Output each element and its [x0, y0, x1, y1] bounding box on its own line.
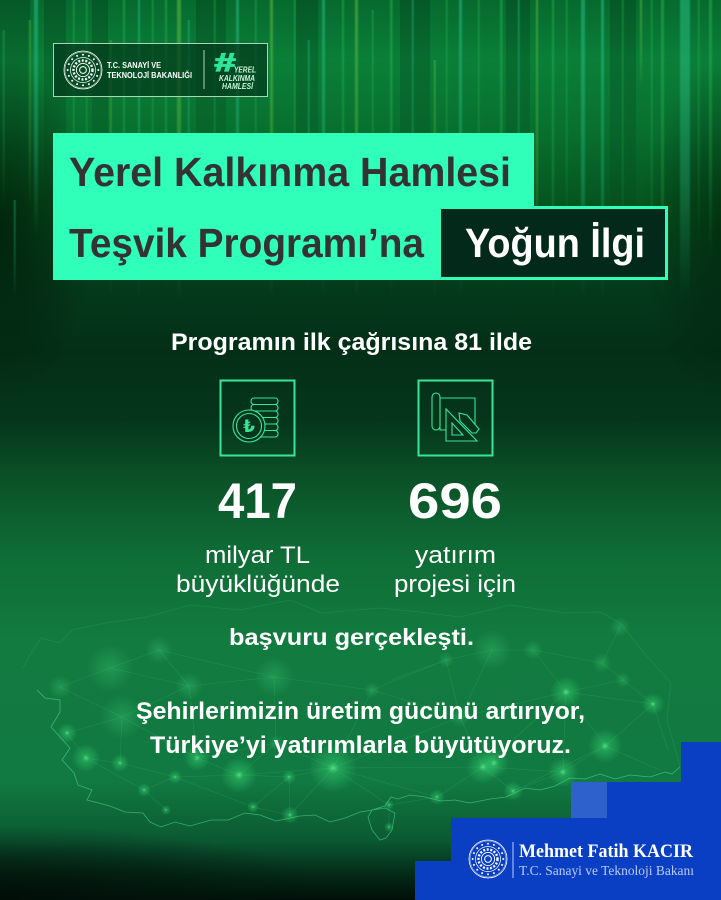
value 696: 696 [408, 473, 502, 529]
map of Türkiye network [23, 600, 680, 840]
icon: plan and set square [418, 380, 492, 456]
caption: büyüklüğünde [176, 571, 340, 598]
network lines [60, 627, 668, 827]
result statement: başvuru gerçekleşti. [229, 624, 474, 650]
ministry name: T.C. SANAYİ VE [107, 61, 162, 70]
header logo box [54, 44, 268, 96]
icon: ministry emblem [64, 51, 102, 89]
minister title: T.C. Sanayi ve Teknoloji Bakanı [519, 863, 694, 878]
caption: milyar TL [205, 542, 310, 569]
title line 1: Yerel Kalkınma Hamlesi [69, 149, 511, 195]
highlighted title box: Yoğun İlgi [465, 220, 645, 266]
icon: ministry emblem [469, 840, 507, 878]
footer: minister signature [415, 742, 721, 900]
title panel [53, 133, 666, 280]
caption [176, 542, 340, 598]
hashtag logo: KALKINMA [219, 73, 255, 83]
stat: project count [394, 380, 516, 598]
icon: lira coins [220, 380, 294, 456]
title line 2: Teşvik Programı’na [69, 220, 425, 266]
closing message: Şehirlerimizin üretim gücünü artırıyor, [136, 698, 585, 725]
ministry name [107, 61, 192, 80]
network glow nodes [48, 617, 664, 832]
hashtag logo [214, 49, 256, 91]
caption [394, 542, 516, 598]
value 417: 417 [218, 473, 297, 529]
hashtag logo: HAMLESİ [222, 81, 254, 91]
ministry name: TEKNOLOJİ BAKANLIĞI [107, 71, 192, 80]
hashtag logo: YEREL [234, 64, 256, 74]
caption: projesi için [394, 571, 516, 598]
icon: lira coins: ₺ [243, 417, 255, 437]
map outline south [37, 690, 680, 840]
subheading: Programın ilk çağrısına 81 ilde [171, 329, 532, 356]
stat: investment amount [176, 380, 340, 598]
hashtag logo: # [214, 49, 235, 77]
caption: yatırım [415, 542, 496, 569]
map outline north [23, 600, 680, 767]
closing message: Türkiye’yi yatırımlarla büyütüyoruz. [150, 732, 571, 759]
highlighted title box [440, 208, 666, 278]
minister name: Mehmet Fatih KACIR [519, 841, 693, 862]
closing message [136, 698, 585, 759]
